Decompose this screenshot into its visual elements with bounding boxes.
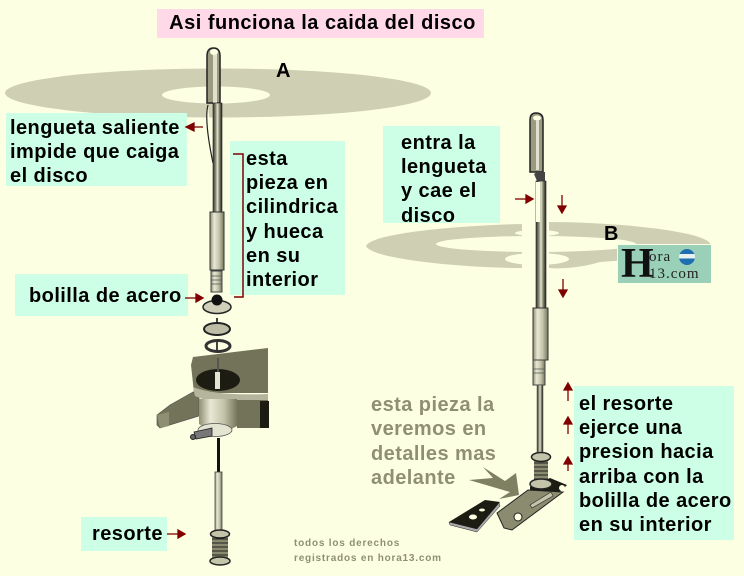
text: resorte: resorte — [92, 523, 163, 545]
text: resorte — [81, 517, 167, 551]
logo text: 13.com — [649, 266, 700, 282]
text: entra la lengueta: disco — [401, 205, 455, 227]
logo text — [649, 249, 700, 282]
text: esta pieza: en su — [246, 245, 300, 267]
disc A — [5, 68, 431, 118]
logo globe — [679, 249, 695, 265]
text: esta pieza: cilindrica — [246, 196, 338, 218]
text: esta pieza la veremos: esta pieza la — [371, 394, 495, 416]
text: entra la lengueta: entra la — [401, 132, 476, 154]
text: el resorte: el resorte — [579, 393, 673, 415]
title: Asi funciona la caida del disco — [169, 12, 476, 34]
text: lengueta saliente: el disco — [10, 165, 88, 187]
text: esta pieza la veremos: adelante — [371, 467, 456, 489]
steel ball and washers — [203, 294, 231, 352]
text: esta pieza: esta — [246, 148, 288, 170]
text: entra la lengueta: y cae el — [401, 180, 477, 202]
spindle B — [530, 113, 548, 455]
text: lengueta saliente: lengueta saliente — [10, 117, 180, 139]
copyright note — [294, 538, 442, 564]
text: lengueta saliente — [6, 113, 187, 186]
text: esta pieza: y hueca — [246, 221, 324, 243]
disc B — [366, 222, 710, 268]
bracket for esta pieza — [233, 154, 243, 297]
label A: A — [276, 60, 290, 82]
text: esta pieza la veremos: veremos en — [371, 418, 487, 440]
text: esta pieza: interior — [246, 269, 318, 291]
star pointer — [469, 467, 519, 499]
spring A — [210, 438, 230, 565]
text: lengueta saliente: impide que caiga — [10, 141, 179, 163]
text: el resorte: bolilla de acero — [579, 490, 732, 512]
red arrows — [167, 123, 572, 538]
copyright note: todos los derechos — [294, 538, 400, 549]
text: el resorte: presion hacia — [579, 441, 714, 463]
text: entra la lengueta — [383, 126, 500, 223]
text: esta pieza — [230, 141, 345, 295]
text: el resorte: ejerce una — [579, 417, 682, 439]
spindle A — [207, 48, 224, 292]
text: el resorte — [574, 386, 734, 540]
copyright note: registrados en hora13.com — [294, 553, 442, 564]
label B: B — [604, 223, 618, 245]
text: entra la lengueta: lengueta — [401, 156, 487, 178]
spring and bracket B — [449, 452, 567, 532]
mechanism base — [157, 348, 269, 440]
text: el resorte: arriba con la — [579, 466, 704, 488]
text: bolilla de acero — [15, 274, 188, 316]
text: esta pieza la veremos: detalles mas — [371, 443, 496, 465]
logo text: ora — [649, 249, 671, 265]
text: bolilla de acero: bolilla de acero — [29, 285, 182, 307]
logo: Hora 13.com — [617, 244, 712, 284]
text: esta pieza la veremos — [371, 394, 496, 489]
text: esta pieza: pieza en — [246, 172, 328, 194]
text: el resorte: en su interior — [579, 514, 712, 536]
